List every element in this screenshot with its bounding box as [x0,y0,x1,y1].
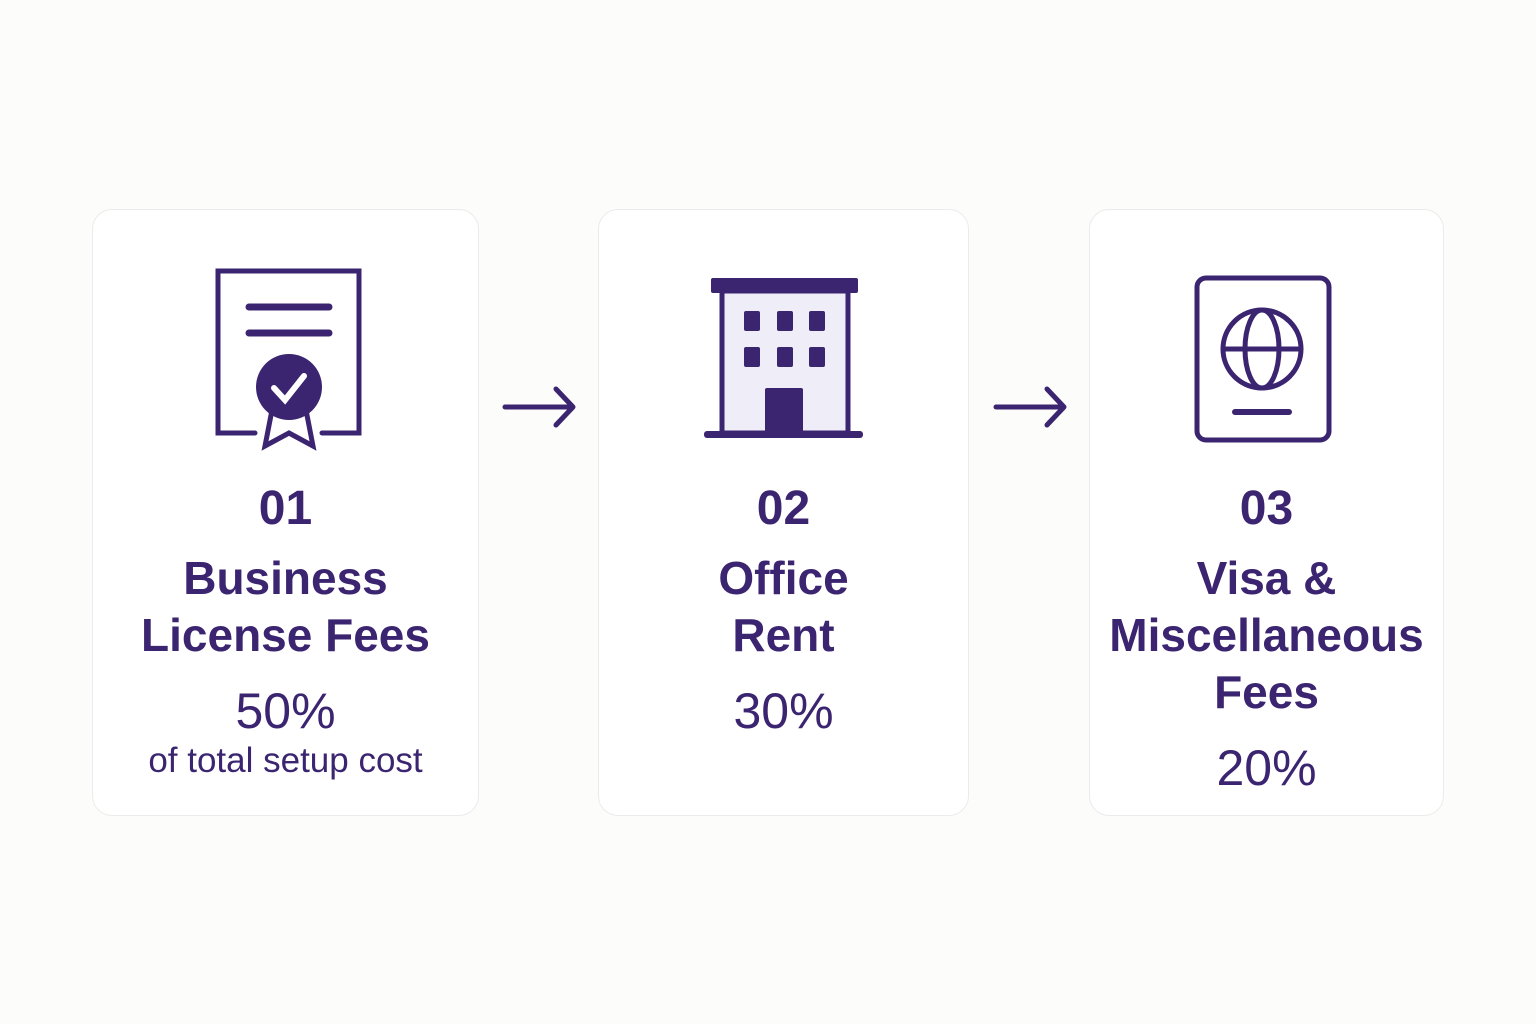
card: visa [1089,209,1444,816]
percent 50: 50% [235,683,336,739]
title: business license fees: License Fees [141,609,430,661]
title: business license fees [141,552,430,661]
card: office rent [598,209,969,816]
title: office rent [718,552,849,661]
title: visa & misc: Fees [1214,666,1319,718]
subtitle: of total setup cost [148,741,423,780]
title: office rent: Rent [732,609,835,661]
icon: certificate [218,271,359,446]
percent 30: 30% [733,683,834,739]
title: visa & misc: Miscellaneous [1109,609,1424,661]
icon: passport [1197,278,1329,440]
icon: building [704,278,863,438]
arrow 2 [996,389,1064,425]
number 03: 03 [1240,482,1293,535]
number 01: 01 [259,482,312,535]
title: business license fees: Business [183,552,388,604]
title: visa & misc: Visa & [1197,552,1336,604]
number 02: 02 [757,482,810,535]
title: office rent: Office [718,552,849,604]
arrow 1 [505,389,573,425]
percent 20: 20% [1216,740,1317,796]
card: business license [92,209,479,816]
title: visa & misc [1109,552,1424,718]
